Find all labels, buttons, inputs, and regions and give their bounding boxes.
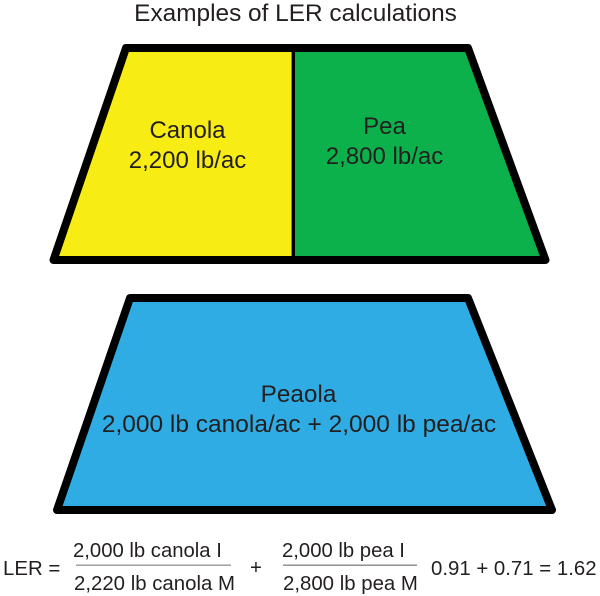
result: 0.91 + 0.71 = 1.62 bbox=[431, 558, 597, 580]
first fraction bar bbox=[76, 564, 231, 566]
pea label: Pea bbox=[363, 113, 407, 140]
plus sign: + bbox=[250, 557, 262, 579]
peaola label: Peaola bbox=[261, 381, 337, 408]
first fraction numerator: 2,000 lb canola I bbox=[73, 540, 222, 562]
pea yield: 2,800 lb/ac bbox=[326, 143, 443, 170]
canola label: Canola bbox=[149, 117, 226, 144]
canola yield: 2,200 lb/ac bbox=[129, 147, 246, 174]
canola plot bbox=[54, 48, 293, 260]
pea plot bbox=[293, 48, 546, 260]
LER equation bbox=[3, 540, 597, 595]
LER label: LER = bbox=[3, 558, 60, 580]
plot outline bbox=[54, 48, 546, 260]
title: Examples of LER calculations bbox=[134, 0, 457, 27]
first fraction denominator: 2,220 lb canola M bbox=[74, 573, 235, 595]
peaola yields: 2,000 lb canola/ac + 2,000 lb pea/ac bbox=[102, 411, 496, 438]
intercrop plot bbox=[57, 298, 552, 510]
panel: peaola intercrop plot bbox=[57, 298, 552, 510]
plot divider bbox=[292, 48, 295, 260]
panel: monoculture plots bbox=[54, 48, 546, 260]
second fraction denominator: 2,800 lb pea M bbox=[283, 573, 418, 595]
second fraction numerator: 2,000 lb pea I bbox=[282, 540, 405, 562]
second fraction bar bbox=[283, 564, 417, 566]
